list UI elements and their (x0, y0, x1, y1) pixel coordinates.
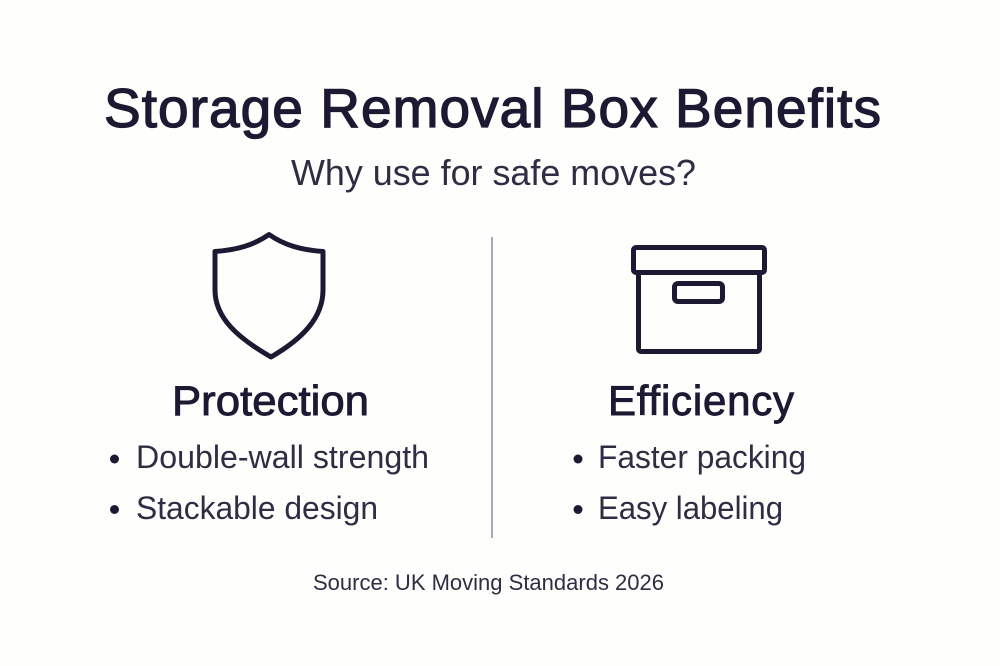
bullet list: protection: Stackable design (136, 490, 378, 526)
bullet list: efficiency: Faster packing (598, 439, 806, 475)
source note: Source: UK Moving Standards 2026 (313, 570, 664, 595)
bullet list: protection: Double-wall strength (136, 439, 429, 475)
icon: storage box (634, 248, 764, 352)
bullet list: efficiency: Easy labeling (598, 490, 783, 526)
bullet list: protection (110, 439, 429, 526)
subtitle: Why use for safe moves? (291, 152, 696, 193)
center divider (491, 237, 493, 538)
heading: protection: Protection (172, 377, 369, 424)
bullet list: efficiency (574, 439, 806, 526)
panel: protection (110, 234, 429, 526)
icon: shield (215, 234, 323, 357)
panel: efficiency (574, 248, 806, 526)
heading: efficiency: Efficiency (608, 377, 794, 424)
title: Storage Removal Box Benefits (104, 77, 881, 139)
